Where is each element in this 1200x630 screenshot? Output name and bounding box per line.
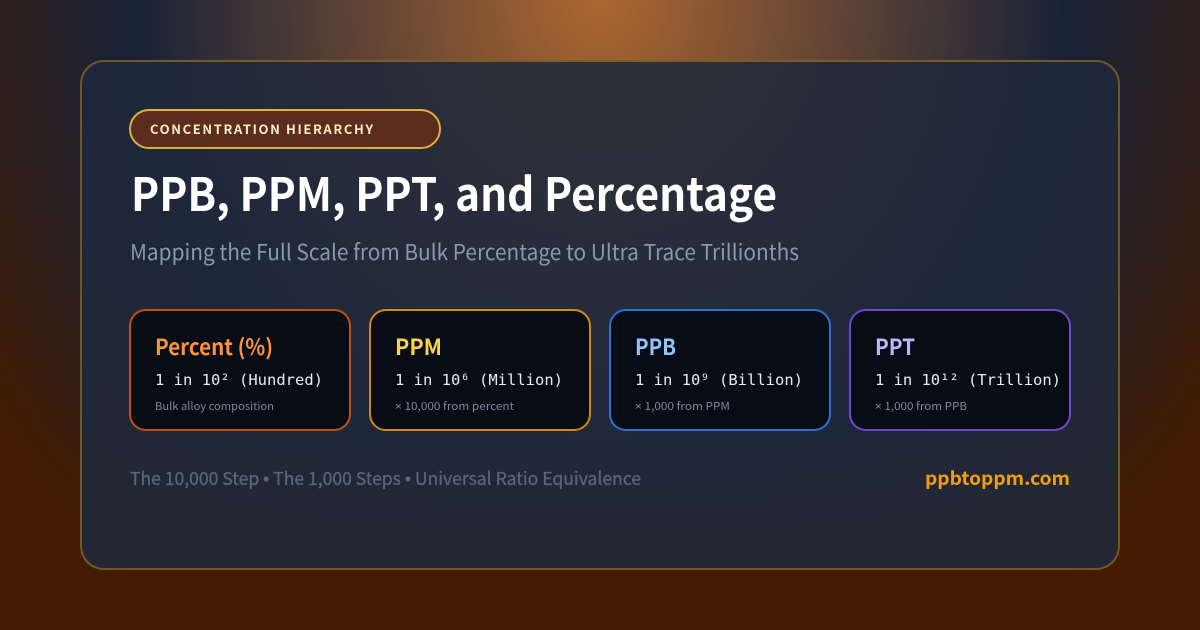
- footer tagline: The 10,000 Step • The 1,000 Steps • Universal Ratio Equivalence: [130, 465, 641, 491]
- ppt heading: PPT: [875, 330, 915, 362]
- panel: percent: [130, 310, 350, 430]
- percent ratio: 1 in 10² (Hundred): [155, 371, 323, 389]
- website url: ppbtoppm.com: [925, 464, 1070, 491]
- percent note: Bulk alloy composition: [155, 398, 274, 414]
- title: PPB, PPM, PPT, and Percentage: [131, 159, 777, 225]
- panel: ppb: [610, 310, 830, 430]
- badge: concentration hierarchy: [130, 110, 440, 148]
- subtitle: Mapping the Full Scale from Bulk Percentage to Ultra Trace Trillionths: [130, 235, 799, 267]
- percent heading: Percent (%): [155, 330, 273, 362]
- ppm ratio: 1 in 10⁶ (Million): [395, 371, 563, 389]
- badge: concentration hierarchy: CONCENTRATION HIERARCHY: [150, 119, 373, 138]
- ppb ratio: 1 in 10⁹ (Billion): [635, 371, 803, 389]
- panel: ppm: [370, 310, 590, 430]
- ppm note: × 10,000 from percent: [395, 398, 514, 414]
- ppb heading: PPB: [635, 330, 676, 362]
- panel: ppt: [850, 310, 1070, 430]
- ppb note: × 1,000 from PPM: [635, 398, 730, 414]
- ppt note: × 1,000 from PPB: [875, 398, 967, 414]
- panel: main card: [80, 60, 1120, 570]
- ppt ratio: 1 in 10¹² (Trillion): [875, 371, 1061, 389]
- ppm heading: PPM: [395, 330, 442, 362]
